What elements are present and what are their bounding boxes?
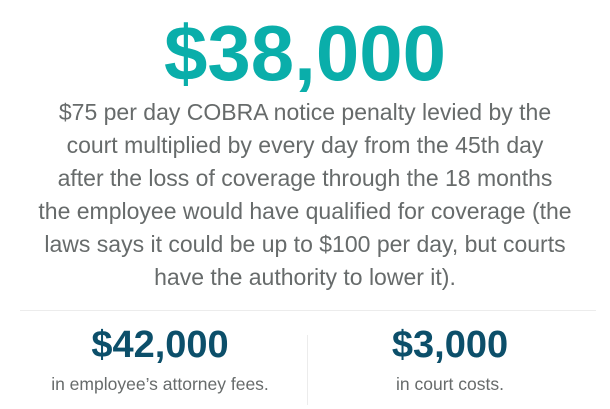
description text [38,99,572,290]
stat: attorney fees [51,324,269,394]
stat: attorney fees: $42,000 [91,324,229,366]
title: $38,000 [164,9,446,97]
description text: laws says it could be up to $100 per day, but courts [44,231,566,257]
stat: court costs: in court costs. [396,374,504,394]
description text: after the loss of coverage through the 18 months [58,165,552,191]
description text: have the authority to lower it). [154,264,456,290]
stat: court costs [392,324,508,394]
description text: the employee would have qualified for coverage (the [38,198,572,224]
description text: $75 per day COBRA notice penalty levied by the [59,99,551,125]
stat: attorney fees: in employee’s attorney fees. [51,374,269,394]
description text: court multiplied by every day from the 45th day [67,132,543,158]
stat: court costs: $3,000 [392,324,508,366]
